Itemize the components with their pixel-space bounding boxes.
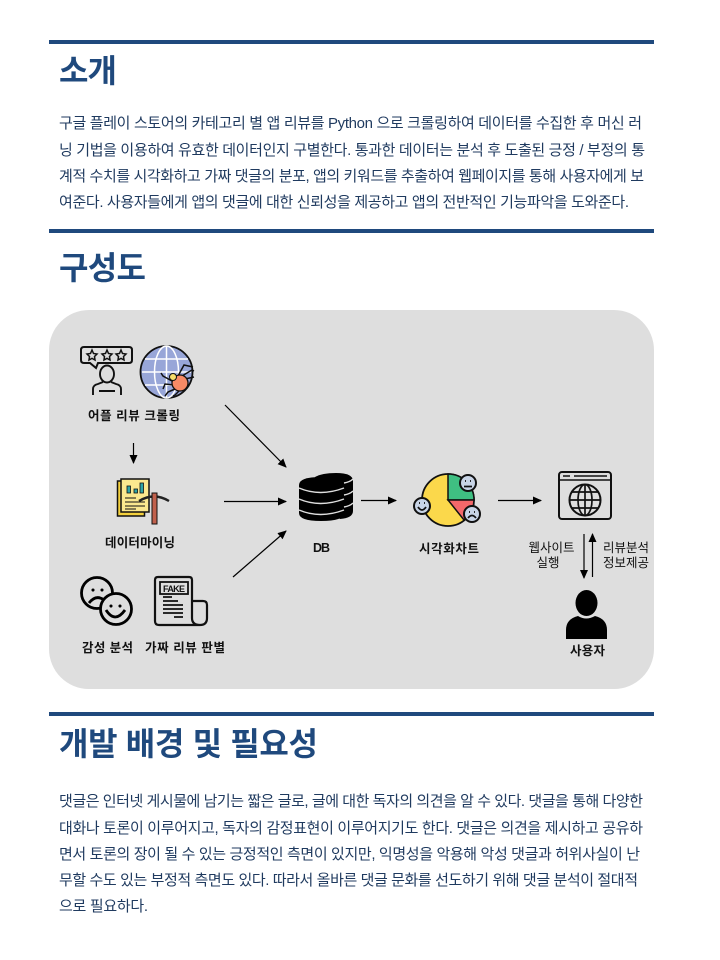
heading: 소개: 소개 <box>59 53 117 89</box>
icon: reviewer with star rating <box>81 347 132 395</box>
paragraph: background: 으로 필요하다. <box>59 898 148 915</box>
label: visualization chart: 시각화차트 <box>419 541 479 556</box>
arrow: mining to database <box>224 500 286 502</box>
section: background and need <box>49 712 654 915</box>
arrow: crawling to database <box>225 405 286 467</box>
section: introduction <box>49 40 654 211</box>
label: run website <box>528 540 575 570</box>
paragraph: background <box>59 793 643 915</box>
arrow: database to chart <box>361 500 396 502</box>
paragraph: introduction: 구글 플레이 스토어의 카테고리 별 앱 리뷰를 Python 으로 크롤링하여 데이터를 수집한 후 머신 러 <box>59 115 642 132</box>
paragraph: background: 댓글은 인터넷 게시물에 남기는 짧은 글로, 글에 대한 독자의 의견을 알 수 있다. 댓글을 통해 다양한 <box>59 793 643 810</box>
paragraph: introduction: 닝 기법을 이용하여 유효한 데이터인지 구별한다. 통과한 데이터는 분석 후 도출된 긍정 / 부정의 통 <box>59 142 645 159</box>
paragraph: background: 면서 토론의 장이 될 수 있는 긍정적인 측면이 있지만, 익명성을 악용해 악성 댓글과 허위사실이 난 <box>59 846 640 863</box>
label: review analysis info <box>603 541 649 570</box>
icon: database <box>299 473 353 521</box>
label: run website: 실행 <box>536 555 560 570</box>
third rule <box>49 712 654 716</box>
arrow: user to website <box>592 534 594 577</box>
icon: sentiment pie chart <box>414 474 480 526</box>
arrow: chart to website <box>498 500 541 502</box>
top rule <box>49 40 654 44</box>
arrow: analysis to database <box>233 531 286 577</box>
icon: fake news document <box>155 577 207 625</box>
arrow: website to user <box>583 534 585 578</box>
label: DB: DB <box>313 541 330 555</box>
heading: 구성도: 구성도 <box>59 250 146 286</box>
paragraph: introduction: 여준다. 사용자들에게 앱의 댓글에 대한 신뢰성을 제공하고 앱의 전반적인 기능파악을 도와준다. <box>59 194 629 211</box>
label: review analysis info: 정보제공 <box>603 556 649 570</box>
second rule <box>49 229 654 233</box>
paragraph: introduction <box>59 115 645 211</box>
icon: website browser <box>559 472 611 519</box>
icon: user silhouette <box>566 590 607 639</box>
icon: data mining <box>118 479 169 524</box>
label: app review crawling: 어플 리뷰 크롤링 <box>88 409 180 423</box>
section: architecture <box>49 229 654 689</box>
label: data mining: 데이터마이닝 <box>105 536 175 550</box>
label: review analysis info: 리뷰분석 <box>603 541 649 555</box>
arrow: crawling to mining <box>132 443 134 463</box>
paragraph: background: 무할 수도 있는 부정적 측면도 있다. 따라서 올바른 댓글 문화를 선도하기 위해 댓글 분석이 절대적 <box>59 872 638 889</box>
paragraph: background: 대화나 토론이 이루어지고, 독자의 감정표현이 이루어지기도 한다. 댓글은 의견을 제시하고 공유하 <box>59 820 643 837</box>
label: user: 사용자 <box>570 644 605 658</box>
label: run website: 웹사이트 <box>528 540 575 555</box>
label: sentiment analysis: 감성 분석 <box>82 641 133 655</box>
paragraph: introduction: 계적 수치를 시각화하고 가짜 댓글의 분포, 앱의 키워드를 추출하여 웹페이지를 통해 사용자에게 보 <box>59 168 644 185</box>
heading: 개발 배경 및 필요성: 개발 배경 및 필요성 <box>59 726 318 762</box>
icon: fake news document: FAKE <box>163 584 185 594</box>
icon: web crawling spider <box>140 346 194 398</box>
panel: architecture diagram <box>49 310 654 689</box>
label: fake review detection: 가짜 리뷰 판별 <box>145 640 225 655</box>
icon: sentiment faces <box>82 578 132 624</box>
